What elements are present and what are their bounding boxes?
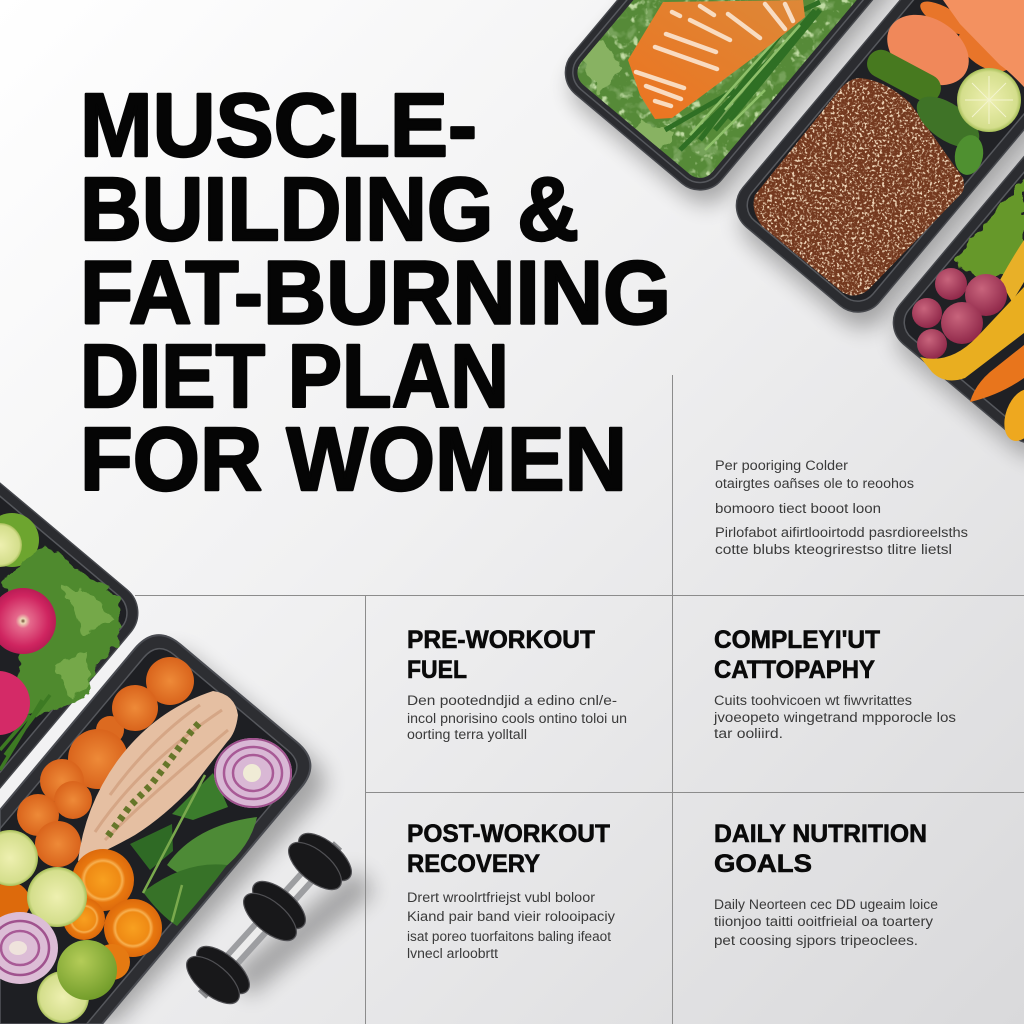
body text bbox=[407, 890, 615, 961]
body text bbox=[713, 693, 956, 741]
heading: GOALS bbox=[714, 850, 812, 878]
body text: isat poreo tuorfaitons baling ifeaot bbox=[407, 929, 611, 944]
body text bbox=[407, 693, 627, 742]
heading: RECOVERY bbox=[407, 850, 540, 878]
title: BUILDING & bbox=[80, 160, 579, 260]
sweet potato slices bbox=[874, 0, 1024, 100]
panel: daily nutrition goals bbox=[714, 820, 938, 948]
title bbox=[80, 76, 671, 510]
intro text block: cotte blubs kteogrirestso tlitre lietsl bbox=[715, 542, 952, 557]
top-right meal prep trays bbox=[554, 0, 1024, 469]
leafy greens bbox=[5, 545, 120, 716]
heading bbox=[407, 626, 595, 684]
body text: incol pnorisino cools ontino toloi un bbox=[407, 711, 627, 726]
body text: lvnecl arloobrtt bbox=[407, 946, 498, 961]
body text bbox=[714, 897, 938, 948]
green peppers and leaves bbox=[862, 45, 988, 177]
body text: jvoeopeto wingetrand mpporocle los bbox=[713, 710, 956, 725]
grid divider lines bbox=[135, 375, 1024, 1024]
carrot rounds bbox=[17, 657, 194, 867]
tray: greens and apples bbox=[0, 458, 150, 954]
title: MUSCLE- bbox=[80, 76, 477, 176]
yellow pepper bbox=[920, 287, 1024, 380]
apples bbox=[0, 588, 56, 735]
second onion slice bbox=[0, 912, 58, 984]
tray: salmon and greens bbox=[560, 0, 899, 215]
intro text block: bomooro tiect booot loon bbox=[715, 501, 881, 516]
body text: Daily Neorteen cec DD ugeaim loice bbox=[714, 897, 938, 912]
panel: complete catalogue bbox=[713, 626, 956, 741]
chicken breast bbox=[78, 691, 238, 861]
heading: FUEL bbox=[407, 656, 467, 684]
heading bbox=[714, 820, 927, 878]
lime slice bbox=[957, 68, 1021, 132]
dumbbell bbox=[179, 825, 365, 1012]
heading: COMPLEYI'UT bbox=[714, 626, 880, 654]
carrot bbox=[970, 345, 1024, 402]
bottom-left meal prep trays bbox=[0, 458, 365, 1024]
body text: tiionjoo taitti ooitfrieial oa toartery bbox=[714, 914, 933, 929]
body text: tar ooliird. bbox=[714, 726, 783, 741]
tray: berries, peppers and carrots bbox=[886, 156, 1024, 466]
heading: PRE-WORKOUT bbox=[407, 626, 595, 654]
green apple bbox=[57, 940, 117, 1000]
orange slices bbox=[0, 849, 162, 980]
red onion slice bbox=[214, 738, 292, 808]
title: DIET PLAN bbox=[80, 327, 509, 427]
title: FAT-BURNING bbox=[80, 244, 671, 344]
body text: Cuits toohvicoen wt fiwvritattes bbox=[714, 693, 912, 708]
lime slices bbox=[0, 830, 89, 1023]
intro text block bbox=[715, 458, 968, 557]
intro text block: Pirlofabot aifirtlooirtodd pasrdioreelsths bbox=[715, 525, 968, 540]
lime slice bbox=[0, 523, 22, 567]
heading: POST-WORKOUT bbox=[407, 820, 610, 848]
body text: pet coosing sjpors tripeoclees. bbox=[714, 933, 918, 948]
heading: CATTOPAPHY bbox=[714, 656, 875, 684]
body text: Kiand pair band vieir rolooipaciy bbox=[407, 909, 615, 924]
heading bbox=[714, 626, 880, 684]
body text: Drert wroolrtfriejst vubl boloor bbox=[407, 890, 596, 905]
heading: DAILY NUTRITION bbox=[714, 820, 927, 848]
title: FOR WOMEN bbox=[80, 410, 627, 510]
salmon fillet bbox=[628, 0, 805, 119]
intro text block: Per pooriging Colder bbox=[715, 458, 849, 473]
heading bbox=[407, 820, 610, 878]
body text: oorting terra yolltall bbox=[407, 727, 527, 742]
radishes bbox=[912, 268, 1007, 359]
tray: quinoa and vegetables bbox=[725, 0, 1024, 339]
tray: chicken, carrots and citrus bbox=[0, 635, 325, 1024]
panel: post-workout recovery bbox=[407, 820, 615, 961]
yellow squash bbox=[998, 384, 1024, 446]
quinoa bbox=[754, 78, 964, 296]
intro text block: otairgtes oañses ole to reoohos bbox=[715, 476, 914, 491]
spinach leaves bbox=[130, 773, 257, 926]
body text: Den pootedndjid a edino cnl/e- bbox=[407, 693, 617, 708]
panel: pre-workout fuel bbox=[407, 626, 627, 742]
